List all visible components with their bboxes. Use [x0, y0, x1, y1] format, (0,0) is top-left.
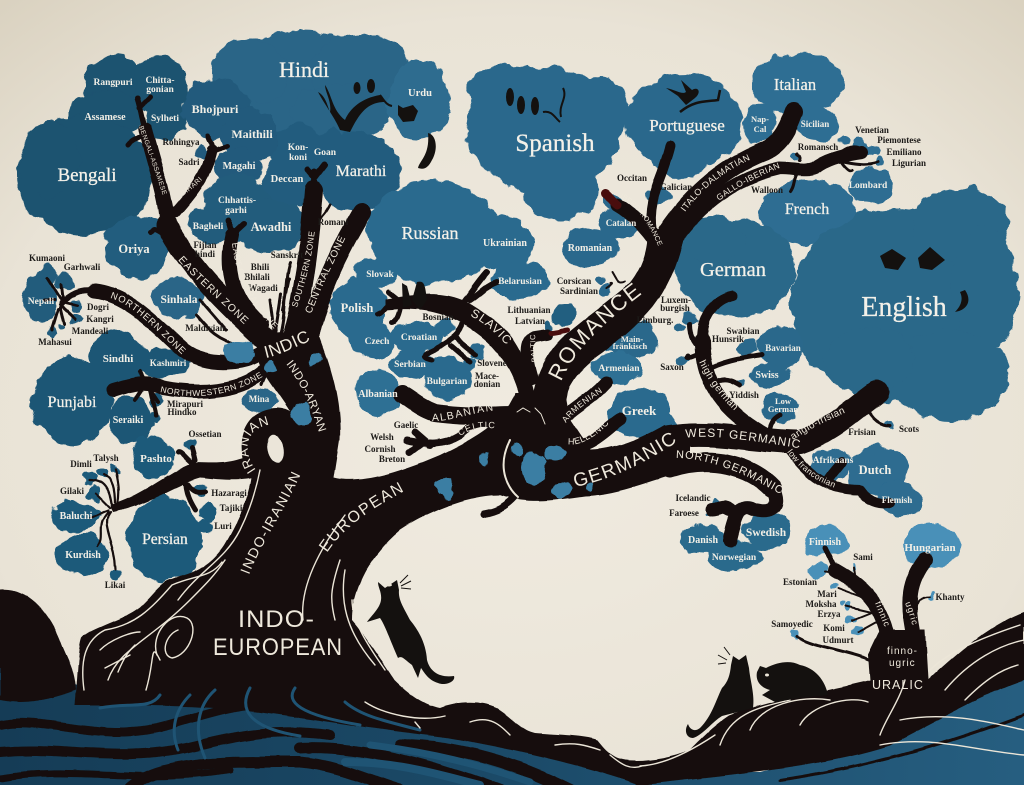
labels on foliage: Danish [688, 535, 718, 546]
blob: Sinhala [153, 279, 203, 320]
family labels on branches: HELLENIC [568, 422, 608, 444]
labels off foliage: Latvian [515, 316, 545, 326]
labels off foliage: Garhwali [64, 262, 101, 272]
family labels on branches: GERMANIC [574, 432, 676, 486]
labels off foliage: Welsh [370, 432, 394, 442]
labels on foliage: Dutch [859, 463, 891, 477]
family labels on branches: SLAVIC [471, 310, 511, 344]
labels off foliage: Kangri [86, 314, 114, 324]
labels on foliage: Chitta- [145, 76, 175, 86]
labels on foliage: Sicilian [801, 119, 829, 129]
labels off foliage: Lithuanian [507, 305, 551, 315]
labels off foliage: Scots [899, 424, 919, 434]
labels off foliage: Gaelic [394, 420, 418, 430]
blue spots at the central node [224, 340, 594, 499]
Urdu cat [398, 105, 436, 169]
family labels on branches: low franconian [787, 448, 835, 488]
blob: Armenian [592, 353, 644, 383]
labels on foliage: Kon- [288, 143, 308, 153]
labels off foliage: Ligurian [892, 158, 926, 168]
large language labels: Spanish [515, 130, 595, 157]
labels on foliage: Norwegian [712, 553, 757, 563]
labels off foliage: Likai [105, 580, 126, 590]
labels on foliage: Pashto [140, 453, 172, 465]
blob: Finnic and Ugric [790, 525, 961, 638]
labels off foliage: Maldivian [185, 323, 225, 333]
labels on foliage: Swiss [755, 370, 779, 381]
labels off foliage: Rohingya [162, 137, 200, 147]
labels on foliage: Oriya [118, 242, 150, 256]
blob: Northern zone [23, 265, 85, 336]
cat lying [757, 662, 828, 702]
large language labels: Persian [142, 531, 188, 548]
foliage: all language blobs [17, 32, 1018, 638]
labels on foliage: Nap- [751, 114, 769, 124]
Slavic limb [385, 294, 535, 400]
labels on foliage: Slovak [366, 270, 394, 280]
labels off foliage: Venetian [855, 125, 889, 135]
English birds [880, 247, 968, 312]
family labels on branches: EASTERN ZONE [178, 256, 249, 324]
blob: Greek [609, 386, 676, 439]
labels off foliage: Galician [660, 182, 692, 192]
labels off foliage: Dogri [87, 302, 109, 312]
Iranian branch [110, 455, 255, 512]
labels on foliage: Urdu [408, 88, 432, 99]
labels off foliage: Icelandic [676, 493, 711, 503]
labels off foliage: Walloon [751, 185, 783, 195]
cat sitting [686, 647, 753, 738]
labels off foliage: Corsican [557, 276, 591, 286]
labels off foliage: Fijian [193, 240, 217, 250]
labels off foliage: burgish [660, 303, 690, 313]
family labels on branches: high german [699, 359, 738, 410]
family labels on branches: EUROPEAN [213, 634, 343, 661]
large language labels: Russian [401, 223, 459, 243]
labels on foliage: Low [775, 396, 792, 406]
large language labels: English [861, 292, 947, 323]
blob: High German group [601, 312, 804, 423]
labels off foliage: Slovene [477, 358, 507, 368]
blob: Slavic group [329, 180, 549, 400]
labels on foliage: Magahi [223, 161, 256, 172]
labels off foliage: Luxem- [661, 295, 691, 305]
labels on foliage: Maithili [231, 127, 273, 141]
labels on foliage: koni [289, 153, 307, 163]
labels on foliage: Awadhi [251, 220, 292, 234]
labels on foliage: Rangpuri [93, 78, 133, 88]
hollow in the Iranian limb [264, 434, 286, 464]
large language labels: German [700, 259, 766, 281]
family labels on branches: NORTHWESTERN ZONE [160, 372, 262, 396]
labels off foliage: Khanty [935, 592, 965, 602]
labels off foliage: Bosnian [422, 312, 454, 322]
labels on foliage: Afrikaans [813, 456, 854, 466]
labels off foliage: Moksha [805, 599, 837, 609]
blob: French and Lombard [760, 166, 893, 245]
large language labels [48, 57, 947, 548]
labels on foliage: Lombard [849, 181, 888, 191]
family labels on branches: BENGALI-ASSAMESE [139, 126, 167, 195]
Uralic branches [797, 548, 930, 665]
labels off foliage: Hindko [167, 407, 197, 417]
labels off foliage: Talysh [93, 453, 119, 463]
labels on foliage: Nepali [28, 297, 55, 307]
labels off foliage: Mandeali [72, 326, 109, 336]
large language labels: Marathi [336, 163, 387, 180]
labels on foliage: Cal [754, 124, 767, 134]
labels off foliage: Occitan [617, 173, 647, 183]
labels on foliage: Sylheti [151, 114, 179, 124]
labels off foliage: Tajiki [220, 503, 243, 513]
large language labels: Italian [774, 75, 816, 94]
labels off foliage: Erzya [818, 609, 841, 619]
labels on foliage: Main- [621, 334, 643, 344]
labels on foliage: Bhojpuri [192, 102, 239, 116]
labels on foliage: Polish [341, 301, 373, 315]
labels off foliage: Sardinian [560, 286, 598, 296]
blue streaks over the roots [100, 688, 530, 785]
labels off foliage: Hunsrik [712, 334, 744, 344]
large language labels: Portuguese [649, 116, 725, 135]
labels on foliage: Kurdish [65, 550, 101, 561]
blob: Bengali-Assamese group [17, 55, 188, 235]
labels off foliage: Sami [853, 552, 873, 562]
blob: Bihari group [182, 77, 280, 186]
labels on foliage: Belarusian [498, 277, 543, 287]
family labels on branches: NORTHERN ZONE [110, 292, 186, 354]
labels on foliage: Deccan [271, 174, 303, 185]
labels on foliage: Ukrainian [483, 238, 527, 249]
family labels on branches: CENTRAL ZONE [306, 236, 346, 313]
labels off foliage: Frisian [848, 427, 876, 437]
labels on foliage: Flemish [882, 495, 912, 505]
large language labels: Punjabi [48, 394, 97, 411]
Romance limb [530, 228, 685, 430]
labels on foliage: Greek [622, 403, 657, 418]
labels on foliage: Bavarian [765, 343, 801, 353]
labels on foliage: Croatian [401, 333, 438, 343]
labels on foliage: Kashmiri [150, 358, 187, 368]
labels off foliage [29, 125, 965, 645]
labels off foliage: Breton [379, 454, 405, 464]
blob: Marathi group [262, 124, 401, 212]
labels off foliage: Mace- [475, 371, 499, 381]
family labels on branches: EUROPEAN [318, 482, 404, 552]
large language labels: French [785, 201, 829, 218]
labels on foliage: Sindhi [103, 353, 133, 365]
labels on foliage: Czech [365, 337, 390, 347]
labels on foliage: Bagheli [193, 222, 224, 232]
Hindi birds [318, 79, 392, 132]
family labels on branches: GALLO-IBERIAN [716, 162, 780, 200]
labels off foliage: Piemontese [877, 135, 921, 145]
labels off foliage: Wagadi [248, 283, 278, 293]
labels on foliage: Mina [249, 394, 270, 404]
labels off foliage: Udmurt [822, 635, 854, 645]
family labels on branches: INDIC [264, 331, 310, 358]
labels on foliage: fränkisch [613, 341, 648, 351]
family labels on branches: URALIC [872, 678, 924, 692]
blob: Oriya [103, 216, 169, 278]
blob: Urdu [386, 62, 450, 138]
cat climbing the trunk [367, 575, 454, 684]
family labels on branches: ROMANCE [548, 282, 642, 380]
labels off foliage: Bhili [251, 262, 270, 272]
labels on foliage: Armenian [598, 364, 640, 374]
labels off foliage: Mari [817, 589, 837, 599]
labels on foliage: Seraiki [113, 415, 143, 426]
labels off foliage: donian [474, 379, 500, 389]
family labels on branches: INDO- [238, 606, 315, 633]
labels on foliage: Albanian [358, 389, 398, 400]
labels off foliage: Ossetian [188, 429, 222, 439]
family labels on branches: SOUTHERN ZONE [292, 231, 315, 308]
blob: Italian group [743, 53, 885, 163]
blob: Iranian group [51, 435, 216, 582]
blob: Baltic [545, 303, 576, 332]
blob: Low Franconian group [809, 421, 921, 516]
family labels on branches: ITALO-DALMATIAN [680, 154, 750, 212]
labels off foliage: Romansch [798, 142, 838, 152]
blob: English [790, 187, 1018, 421]
labels on foliage: Chhattis- [218, 196, 256, 206]
Russian branch birds [402, 282, 427, 310]
Portuguese bird [666, 80, 720, 112]
family labels on branches: WEST GERMANIC [685, 428, 800, 448]
blob: Albanian [355, 371, 401, 417]
family labels on branches: INDO-IRANIAN [240, 472, 300, 574]
labels off foliage: Faroese [669, 508, 699, 518]
labels on foliage: Assamese [84, 112, 126, 123]
labels off foliage: Cornish [364, 444, 396, 454]
family labels on branches: ugric [889, 658, 916, 669]
Indic branches [45, 97, 362, 415]
labels off foliage: Limburg. [637, 315, 673, 325]
family labels on branches: NORTH GERMANIC [676, 450, 782, 493]
labels off foliage: Luri [214, 521, 232, 531]
large language labels: Bengali [57, 165, 117, 186]
blob: East Central group [188, 176, 308, 253]
labels off foliage: Emiliano [886, 147, 922, 157]
family labels on branches: ugric [906, 602, 917, 625]
birds in the canopy [318, 79, 968, 312]
water at the bottom [0, 650, 1024, 785]
family labels on branches: IBERO-ROMANCE [635, 208, 662, 246]
family labels on branches: ARMENIAN [562, 388, 602, 423]
labels on foliage: Hungarian [904, 542, 956, 554]
labels off foliage: Swabian [726, 326, 760, 336]
labels off foliage: Mahasui [38, 337, 72, 347]
large language labels: Hindi [279, 57, 329, 82]
family labels on branches [110, 126, 924, 692]
family labels on branches: ALBANIAN [432, 406, 492, 422]
labels on foliage: Swedish [746, 527, 787, 539]
labels on foliage: Serbian [394, 360, 427, 370]
family labels on branches: INDO-ARYAN [286, 360, 326, 432]
labels off foliage: Gilaki [60, 486, 84, 496]
labels on foliage: Finnish [809, 537, 842, 548]
left rock [0, 589, 76, 702]
blob: Northwestern zone [32, 331, 188, 446]
family labels on branches: BIHARI [184, 176, 202, 196]
labels on foliage: Romanian [568, 243, 613, 254]
labels off foliage: hindi [195, 249, 216, 259]
labels off foliage: Hazaragi [211, 488, 247, 498]
white grain lines in the trunk [83, 408, 1024, 767]
labels off foliage: Kumaoni [29, 253, 66, 263]
labels off foliage: Saxon [660, 362, 684, 372]
labels off foliage: Samoyedic [771, 619, 813, 629]
labels off foliage: Yiddish [729, 390, 759, 400]
blob: German [675, 216, 795, 318]
family labels on branches: BALTIC [530, 334, 536, 362]
labels off foliage: Mirapuri [167, 399, 203, 409]
family labels on branches: anglo-frisian [791, 408, 845, 440]
labels on foliage: Goan [314, 148, 337, 158]
labels on foliage: German [768, 404, 798, 414]
trunk and ground [75, 330, 1024, 785]
blob: Mina [241, 388, 277, 412]
limb strokes [378, 112, 890, 540]
labels on foliage [28, 76, 956, 563]
family labels on branches: IRANIAN [242, 416, 268, 474]
labels off foliage: Komi [823, 623, 845, 633]
family labels on branches: finnic [875, 601, 889, 626]
labels off foliage: Sadri [178, 157, 200, 167]
labels on foliage: Baluchi [60, 511, 93, 522]
black streaks in the water [0, 705, 1024, 785]
labels off foliage: Romani [318, 217, 349, 227]
family labels on branches: CELTIC [458, 422, 494, 435]
blob: Romance group [467, 62, 741, 296]
family labels on branches: EAST CENTRAL ZONE [232, 242, 278, 329]
labels on foliage: garhi [225, 206, 247, 216]
labels off foliage: Sanskrit [271, 250, 303, 260]
Spanish birds [506, 88, 564, 122]
blob: North Germanic group [679, 502, 791, 572]
family labels on branches: finno- [887, 646, 918, 657]
blob: Hindi [210, 32, 412, 144]
labels off foliage: Estonian [783, 577, 817, 587]
labels on foliage: Sinhala [160, 294, 198, 306]
labels off foliage: Bhilali [244, 272, 270, 282]
labels on foliage: Catalan [606, 218, 636, 228]
labels off foliage: Dimli [70, 459, 92, 469]
labels on foliage: gonian [146, 85, 174, 95]
labels on foliage: Bulgarian [427, 377, 468, 387]
